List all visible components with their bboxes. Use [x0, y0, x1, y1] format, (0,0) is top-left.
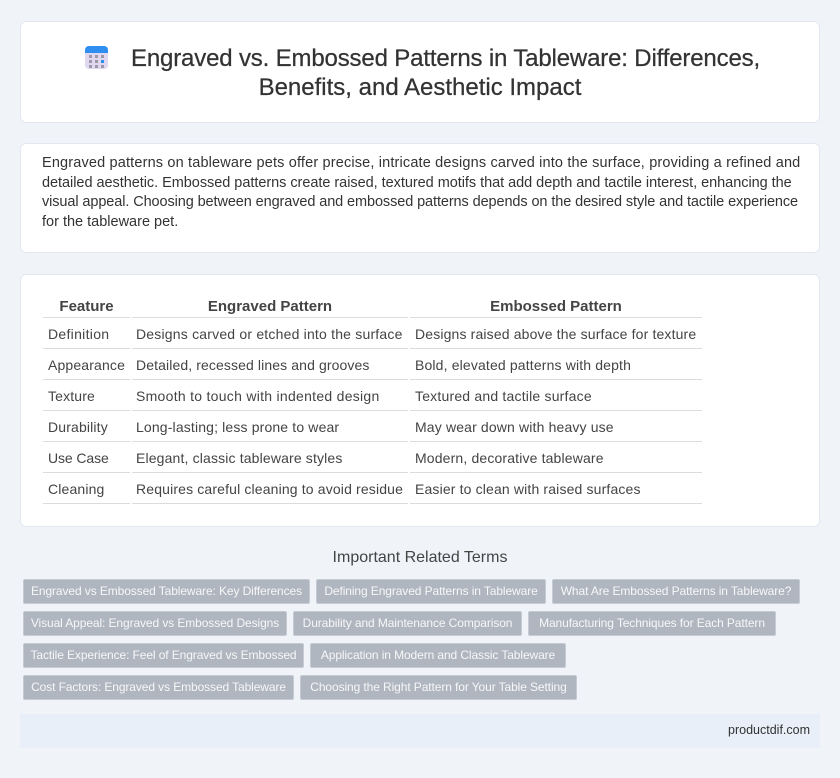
comparison table: Requires careful cleaning to avoid residue: [136, 481, 403, 497]
comparison table: Appearance: [48, 357, 125, 373]
related term tags: [23, 579, 800, 700]
related term tags: Defining Engraved Patterns in Tableware: [324, 584, 538, 598]
comparison table: [43, 298, 702, 504]
comparison table: Definition: [48, 326, 109, 342]
intro text: Engraved patterns on tableware pets offer precise, intricate designs carved into the surface, providing a refined and: [42, 155, 800, 171]
related term tags: Visual Appeal: Engraved vs Embossed Designs: [31, 616, 279, 630]
comparison table: Feature: [59, 298, 114, 315]
comparison table: Designs raised above the surface for texture: [415, 326, 696, 342]
comparison table: Cleaning: [48, 481, 104, 497]
title: [131, 45, 760, 101]
comparison table: Use Case: [48, 450, 109, 466]
intro text: for the tableware pet.: [42, 214, 178, 230]
header panel: [20, 21, 820, 123]
comparison table: Durability: [48, 419, 108, 435]
related term tags: Engraved vs Embossed Tableware: Key Differences: [31, 584, 302, 598]
comparison table: Bold, elevated patterns with depth: [415, 357, 631, 373]
intro text: [42, 155, 800, 230]
related term tags: Durability and Maintenance Comparison: [303, 616, 512, 630]
title: Benefits, and Aesthetic Impact: [259, 74, 581, 101]
related term tags: Cost Factors: Engraved vs Embossed Tableware: [31, 680, 286, 694]
related term tags: What Are Embossed Patterns in Tableware?: [561, 584, 791, 598]
comparison table: Detailed, recessed lines and grooves: [136, 357, 370, 373]
intro panel: [20, 143, 820, 253]
footer source: productdif.com: [728, 723, 810, 737]
comparison table: Designs carved or etched into the surface: [136, 326, 403, 342]
comparison table: Engraved Pattern: [208, 298, 332, 315]
table panel: [20, 274, 820, 527]
comparison table: Smooth to touch with indented design: [136, 388, 380, 404]
comparison table: Easier to clean with raised surfaces: [415, 481, 641, 497]
footer bar: [20, 714, 820, 748]
related term tags: Manufacturing Techniques for Each Pattern: [539, 616, 765, 630]
comparison table: Textured and tactile surface: [415, 388, 592, 404]
related terms heading: Important Related Terms: [333, 549, 507, 566]
title: Engraved vs. Embossed Patterns in Tableware: Differences,: [131, 45, 760, 72]
comparison table: Long-lasting; less prone to wear: [136, 419, 339, 435]
intro text: visual appeal. Choosing between engraved and embossed patterns depends on the desired style and tactile experience: [42, 194, 798, 210]
comparison table: Modern, decorative tableware: [415, 450, 604, 466]
icon: calendar: [85, 46, 108, 69]
related term tags: Application in Modern and Classic Tableware: [321, 648, 555, 662]
comparison table: Embossed Pattern: [490, 298, 622, 315]
related term tags: Choosing the Right Pattern for Your Table Setting: [310, 680, 567, 694]
comparison table: Texture: [48, 388, 95, 404]
comparison table: Elegant, classic tableware styles: [136, 450, 342, 466]
intro text: detailed aesthetic. Embossed patterns create raised, textured motifs that add depth and tactile interest, enhancing the: [42, 174, 792, 190]
related term tags: Tactile Experience: Feel of Engraved vs Embossed: [30, 648, 296, 662]
comparison table: May wear down with heavy use: [415, 419, 614, 435]
